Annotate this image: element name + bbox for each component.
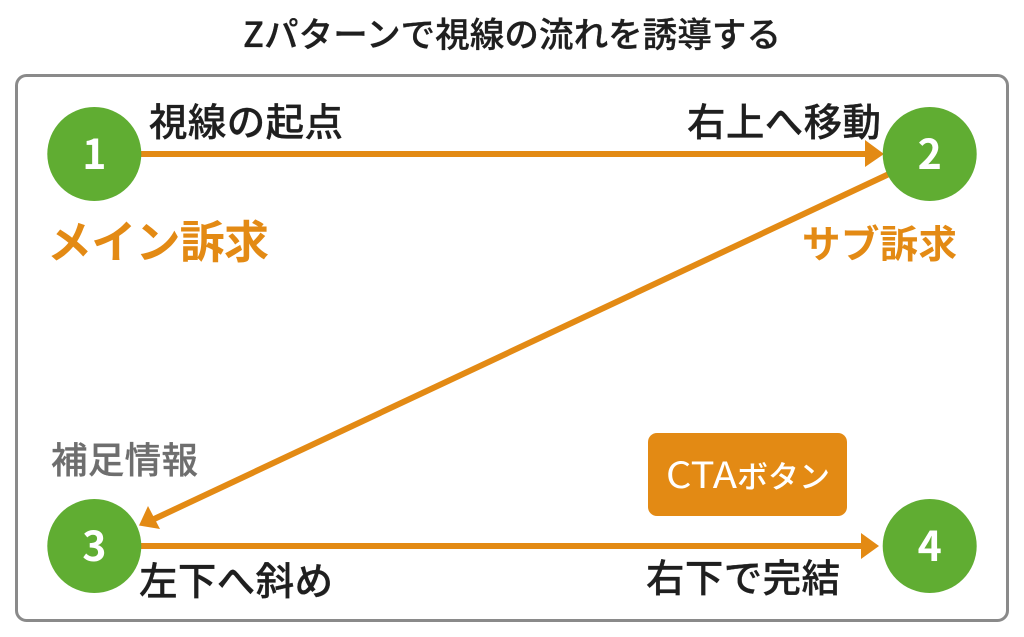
CTA button (648, 433, 847, 516)
label: start of gaze: 視線の起点 (149, 92, 343, 148)
CTA button: CTA (666, 447, 737, 499)
step 3 circle (47, 499, 141, 593)
arrow: 1 to 2 (135, 140, 884, 167)
step 2 circle (883, 107, 977, 201)
step 1 circle: 1 (82, 121, 106, 181)
label: sub appeal: サブ訴求 (802, 214, 957, 270)
CTA button: ボタン (737, 452, 830, 497)
label: supplementary info: 補足情報 (51, 431, 198, 484)
label: main appeal: メイン訴求 (47, 206, 269, 271)
step 2 circle: 2 (918, 121, 942, 181)
step 3 circle: 3 (82, 513, 106, 573)
step 4 circle: 4 (918, 513, 942, 573)
label: finish at lower right: 右下で完結 (646, 548, 840, 604)
arrow: 3 to 4 (135, 533, 879, 559)
arrow: 2 to 3 (139, 174, 889, 529)
step 4 circle (883, 499, 977, 593)
label: move to upper right: 右上へ移動 (687, 92, 881, 148)
title: Zパターンで視線の流れを誘導する (243, 7, 781, 57)
label: diagonal to lower left: 左下へ斜め (139, 551, 333, 607)
step 1 circle (47, 107, 141, 201)
